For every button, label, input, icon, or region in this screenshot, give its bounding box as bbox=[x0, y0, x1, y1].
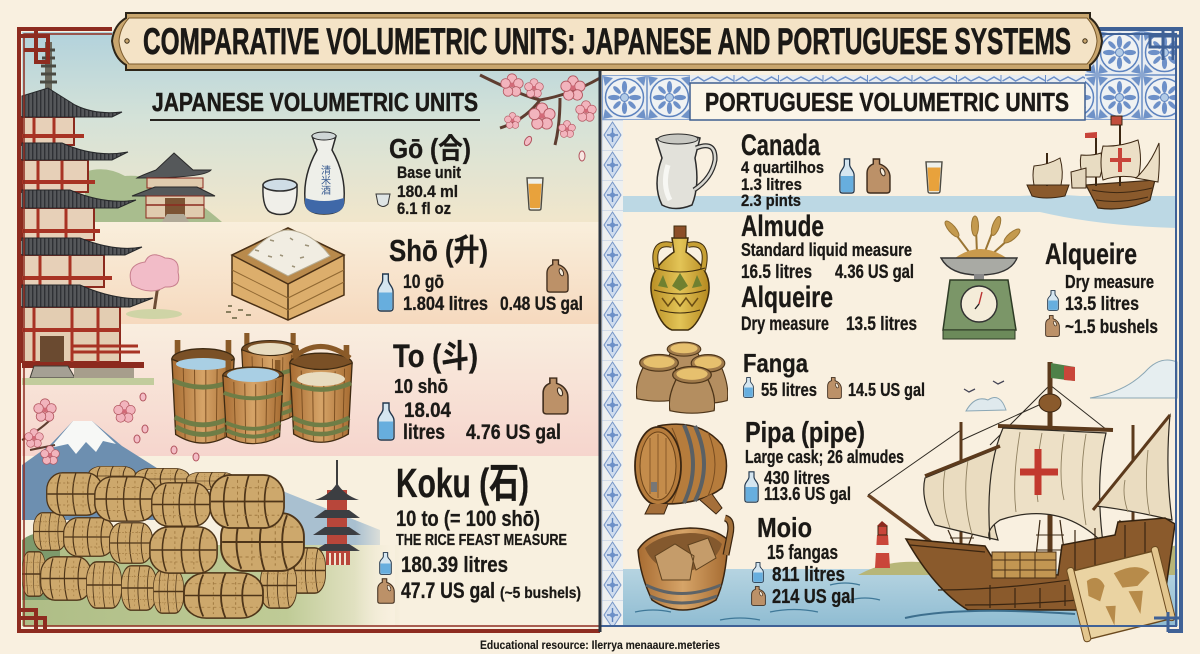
illustration: sake bottle: 清米酒 bbox=[318, 164, 330, 196]
illustration: scale with grain bbox=[941, 215, 1022, 339]
icon: jug bbox=[1046, 316, 1059, 336]
illustration: green hills behind temple bbox=[85, 169, 222, 222]
unit: Alqueire (right): Dry measure bbox=[1065, 272, 1154, 292]
unit: Alqueire (right): 13.5 litres bbox=[1065, 294, 1139, 315]
illustration: sea bbox=[623, 545, 1178, 626]
unit: Canada: Canada bbox=[741, 129, 820, 162]
unit: To: To (斗) bbox=[393, 338, 478, 374]
unit: Canada: 4 quartilhos bbox=[741, 158, 824, 177]
illustration: water strip bbox=[623, 195, 1177, 228]
illustration: cherry branch top right bbox=[480, 74, 600, 161]
unit: Pipa: Large cask; 26 almudes bbox=[745, 447, 904, 467]
footer credit: Educational resource: Ilerrya menaaure.meteries bbox=[480, 638, 720, 652]
unit: Almude bbox=[741, 210, 914, 283]
icon: beer glass bbox=[527, 178, 543, 210]
icon: beer glass bbox=[926, 162, 942, 193]
unit: To bbox=[378, 338, 568, 444]
illustration: sakura tree bbox=[126, 255, 182, 319]
unit: Almude: Almude bbox=[741, 210, 824, 243]
panel: Portuguese background bbox=[602, 75, 1178, 627]
illustration: golden amphora bbox=[651, 226, 709, 330]
illustration: sake cup bbox=[263, 179, 297, 214]
text fade over landscape bbox=[355, 470, 395, 626]
unit: To: 10 shō bbox=[394, 376, 448, 398]
illustration: stacked rice bales bbox=[22, 466, 326, 618]
unit: Moio: 15 fangas bbox=[767, 542, 838, 564]
icon: bottle bbox=[840, 159, 854, 193]
unit: Go bbox=[376, 133, 543, 218]
illustration: grain sacks bbox=[636, 342, 728, 413]
icon: bottle bbox=[753, 563, 763, 582]
illustration: small caravel bbox=[1027, 153, 1069, 198]
icon: bottle bbox=[380, 553, 391, 574]
unit: Canada: 1.3 litres bbox=[741, 175, 802, 194]
unit: Go: 6.1 fl oz bbox=[397, 199, 451, 218]
unit: Sho: Shō (升) bbox=[389, 233, 488, 268]
illustration: wooden tub bbox=[638, 518, 731, 610]
illustration: wine barrel bbox=[635, 424, 726, 514]
unit: Alqueire (left): 13.5 litres bbox=[846, 314, 917, 335]
unit: Sho: 10 gō bbox=[403, 272, 444, 293]
unit: Sho bbox=[378, 233, 583, 315]
illustration: caravel at top right bbox=[1071, 116, 1159, 209]
icon: jug bbox=[547, 260, 568, 292]
unit: Fanga: 55 litres bbox=[761, 380, 817, 400]
icon: bottle bbox=[745, 472, 758, 502]
unit: Sho: 0.48 US gal bbox=[500, 294, 583, 315]
unit: Pipa: 430 litres bbox=[764, 468, 830, 488]
title banner bbox=[112, 13, 1102, 70]
illustration: Mount Fuji bbox=[22, 421, 160, 520]
illustration: sakura sprig at left bbox=[22, 393, 199, 464]
unit: Koku: 10 to (= 100 shō) bbox=[396, 506, 540, 531]
unit: Almude: Standard liquid measure bbox=[741, 240, 912, 260]
unit: Moio: Moio bbox=[757, 512, 812, 543]
illustration: large caravel bbox=[868, 362, 1175, 618]
unit: Fanga: Fanga bbox=[743, 348, 808, 378]
unit: Alqueire (left): Dry measure bbox=[741, 314, 829, 335]
illustration: wooden buckets bbox=[172, 333, 352, 444]
unit: Almude: 4.36 US gal bbox=[835, 262, 914, 283]
heading: Portuguese units: PORTUGUESE VOLUMETRIC UNITS bbox=[705, 87, 1069, 117]
icon: bottle bbox=[744, 378, 753, 397]
icon: bottle bbox=[378, 403, 394, 440]
unit: Almude: 16.5 litres bbox=[741, 262, 812, 283]
unit: Canada bbox=[741, 129, 942, 210]
illustration: white pitcher bbox=[656, 134, 715, 208]
unit: Koku: 180.39 litres bbox=[401, 552, 508, 577]
unit: Canada: 2.3 pints bbox=[741, 191, 801, 210]
icon: jug bbox=[867, 159, 890, 193]
illustration: lighthouse and headland bbox=[858, 521, 935, 575]
icon: bottle bbox=[1048, 291, 1058, 310]
unit: Alqueire (left) bbox=[741, 281, 917, 335]
unit: Alqueire (left): Alqueire bbox=[741, 281, 833, 314]
unit: Moio bbox=[752, 512, 855, 608]
unit: Fanga: 14.5 US gal bbox=[848, 380, 925, 400]
icon: bottle bbox=[378, 274, 393, 311]
illustration: small temple bbox=[132, 153, 215, 222]
unit: Koku bbox=[378, 460, 581, 603]
panel: Japanese background bands bbox=[22, 32, 600, 626]
unit: Fanga bbox=[743, 348, 925, 400]
heading: Portuguese units bbox=[690, 83, 1085, 120]
unit: Alqueire (right) bbox=[1045, 238, 1158, 338]
unit: Moio: 214 US gal bbox=[772, 586, 855, 608]
unit: Go: Base unit bbox=[397, 163, 461, 182]
unit: Sho: 1.804 litres bbox=[403, 294, 488, 315]
unit: Pipa bbox=[745, 417, 904, 504]
illustration: azulejo tile border bbox=[602, 30, 1177, 626]
unit: Koku: THE RICE FEAST MEASURE bbox=[396, 532, 567, 549]
illustration: pagoda bbox=[22, 42, 154, 385]
unit: To: 4.76 US gal bbox=[466, 421, 561, 444]
unit: Moio: 811 litres bbox=[772, 564, 845, 586]
illustration: distant mountain and grass bbox=[22, 490, 400, 626]
unit: Alqueire (right): ~1.5 bushels bbox=[1065, 317, 1158, 338]
unit: Alqueire (right): Alqueire bbox=[1045, 238, 1137, 271]
illustration: clouds and birds bbox=[964, 360, 1177, 411]
icon: small sake cup bbox=[376, 194, 390, 206]
central divider bbox=[598, 70, 602, 632]
unit: Koku: (~5 bushels) bbox=[500, 585, 581, 602]
unit: To: 18.04 bbox=[404, 399, 451, 422]
unit: Pipa: Pipa (pipe) bbox=[745, 417, 865, 449]
unit: Koku: Koku (石) bbox=[396, 460, 529, 506]
icon: jug bbox=[752, 587, 765, 605]
unit: Pipa: 113.6 US gal bbox=[764, 484, 851, 504]
icon: jug bbox=[543, 378, 568, 414]
icon: jug bbox=[828, 378, 841, 398]
icon: jug bbox=[378, 579, 394, 603]
frame: Portuguese blue border bbox=[600, 28, 1182, 632]
illustration: parchment map bbox=[1066, 546, 1176, 642]
frame: Japanese red border bbox=[18, 28, 600, 632]
illustration: small five-tier pagoda bbox=[313, 460, 361, 565]
illustration: wooden rice box bbox=[226, 228, 344, 320]
unit: Go: Gō (合) bbox=[389, 133, 471, 164]
unit: Go: 180.4 ml bbox=[397, 182, 458, 201]
unit: Koku: 47.7 US gal bbox=[401, 578, 495, 603]
illustration: sake bottle bbox=[305, 132, 344, 214]
heading: Japanese units: JAPANESE VOLUMETRIC UNITS bbox=[152, 87, 478, 117]
unit: To: litres bbox=[403, 421, 445, 444]
